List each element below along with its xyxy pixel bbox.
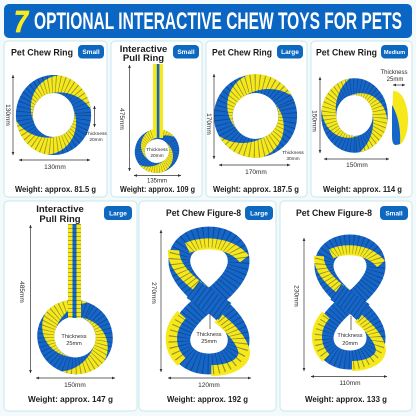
height dimension xyxy=(292,238,304,371)
width dimension xyxy=(324,159,389,169)
height dimension: 475mm xyxy=(118,108,125,130)
thickness callout: 25mm xyxy=(201,339,217,345)
thickness callout: Thickness xyxy=(146,147,168,153)
weight: Weight: approx. 187.5 g xyxy=(213,185,299,194)
thickness callout: 20mm xyxy=(89,137,103,143)
thickness callout: Thickness xyxy=(85,131,107,137)
size badge xyxy=(245,206,273,220)
thickness callout: 25mm xyxy=(387,77,403,83)
weight: Weight: approx. 147 g xyxy=(28,395,113,404)
width dimension xyxy=(134,176,181,184)
size badge xyxy=(381,45,408,58)
size badge: Medium xyxy=(384,50,405,56)
size badge: Small xyxy=(177,49,195,56)
width dimension xyxy=(219,165,290,176)
thickness callout: 25mm xyxy=(66,341,82,347)
height dimension xyxy=(4,75,13,155)
heading xyxy=(36,204,84,225)
size badge: Large xyxy=(281,49,299,56)
icon: ring toy xyxy=(203,63,308,169)
width dimension: 135mm xyxy=(147,178,167,184)
size badge xyxy=(173,45,199,58)
height dimension: 150mm xyxy=(310,110,318,132)
heading: Interactive xyxy=(36,204,84,215)
heading: Pet Chew Figure-8 xyxy=(166,208,241,219)
heading: Pet Chew Ring xyxy=(11,48,73,58)
heading: Pull Ring xyxy=(123,53,164,64)
thickness callout: Thickness xyxy=(196,332,222,338)
heading: Pet Chew Ring xyxy=(212,48,272,58)
panel: pet chew ring large xyxy=(203,41,308,197)
heading: Interactive xyxy=(120,44,167,55)
height dimension xyxy=(118,65,130,171)
thickness callout: 30mm xyxy=(286,156,300,162)
icon: pull ring toy xyxy=(24,224,126,387)
width dimension: 170mm xyxy=(245,169,267,176)
thickness callout: Thickness xyxy=(282,150,304,156)
thickness callout: 20mm xyxy=(342,341,358,347)
thickness callout: Thickness xyxy=(61,334,87,340)
thickness callout xyxy=(380,70,408,85)
panel: pet chew ring small xyxy=(4,41,107,197)
heading: Pull Ring xyxy=(39,214,81,225)
width dimension: 110mm xyxy=(339,380,361,387)
icon: pull ring toy xyxy=(127,64,187,181)
weight: Weight: approx. 133 g xyxy=(305,395,387,404)
header banner xyxy=(4,4,412,39)
height dimension xyxy=(310,77,320,153)
width dimension xyxy=(19,160,90,171)
size badge xyxy=(78,45,104,58)
thickness callout: Thickness xyxy=(380,70,408,76)
panel: pet chew figure-8 large xyxy=(139,201,276,411)
panel: pet chew ring medium xyxy=(310,41,412,197)
thickness callout: 20mm xyxy=(150,153,164,159)
width dimension xyxy=(36,378,115,389)
icon: ring side view xyxy=(392,91,408,145)
weight: Weight: approx. 114 g xyxy=(323,185,402,194)
heading: Pet Chew Ring xyxy=(316,48,377,58)
size badge xyxy=(277,45,303,58)
icon: figure-8 toy xyxy=(171,237,244,371)
panel: pet chew figure-8 small xyxy=(280,201,412,411)
weight: Weight: approx. 192 g xyxy=(167,395,248,404)
size badge xyxy=(380,206,408,220)
heading: Pet Chew Figure-8 xyxy=(296,208,372,219)
thickness callout xyxy=(146,147,168,159)
thickness callout xyxy=(337,316,363,347)
size badge: Small xyxy=(82,49,100,56)
width dimension: 120mm xyxy=(198,382,220,389)
height dimension: 230mm xyxy=(292,285,300,307)
height dimension: 130mm xyxy=(4,104,11,126)
size badge: Large xyxy=(109,210,127,218)
thickness callout xyxy=(282,150,304,162)
width dimension: 150mm xyxy=(64,382,86,389)
panel: interactive pull ring small xyxy=(111,41,202,197)
width dimension: 150mm xyxy=(346,162,368,169)
height dimension xyxy=(205,74,214,159)
height dimension: 170mm xyxy=(205,113,212,135)
thickness callout xyxy=(85,106,107,143)
weight: Weight: approx. 109 g xyxy=(120,185,195,194)
thickness callout xyxy=(196,313,222,345)
icon: figure-8 toy xyxy=(317,244,381,366)
width dimension xyxy=(311,376,387,387)
size badge xyxy=(104,206,132,220)
width dimension xyxy=(168,378,251,389)
size badge: Small xyxy=(385,210,403,218)
weight: Weight: approx. 81.5 g xyxy=(15,185,96,194)
width dimension: 130mm xyxy=(44,164,66,171)
height dimension: 270mm xyxy=(150,282,157,304)
thickness callout xyxy=(61,334,87,347)
icon: ring toy xyxy=(16,75,91,155)
height dimension: 485mm xyxy=(18,281,25,303)
panel: interactive pull ring large xyxy=(4,201,137,411)
thickness callout: Thickness xyxy=(337,333,363,339)
size badge: Large xyxy=(250,210,268,218)
header number 7: 7 xyxy=(14,4,29,39)
heading xyxy=(120,44,167,64)
icon: ring toy xyxy=(322,79,387,152)
